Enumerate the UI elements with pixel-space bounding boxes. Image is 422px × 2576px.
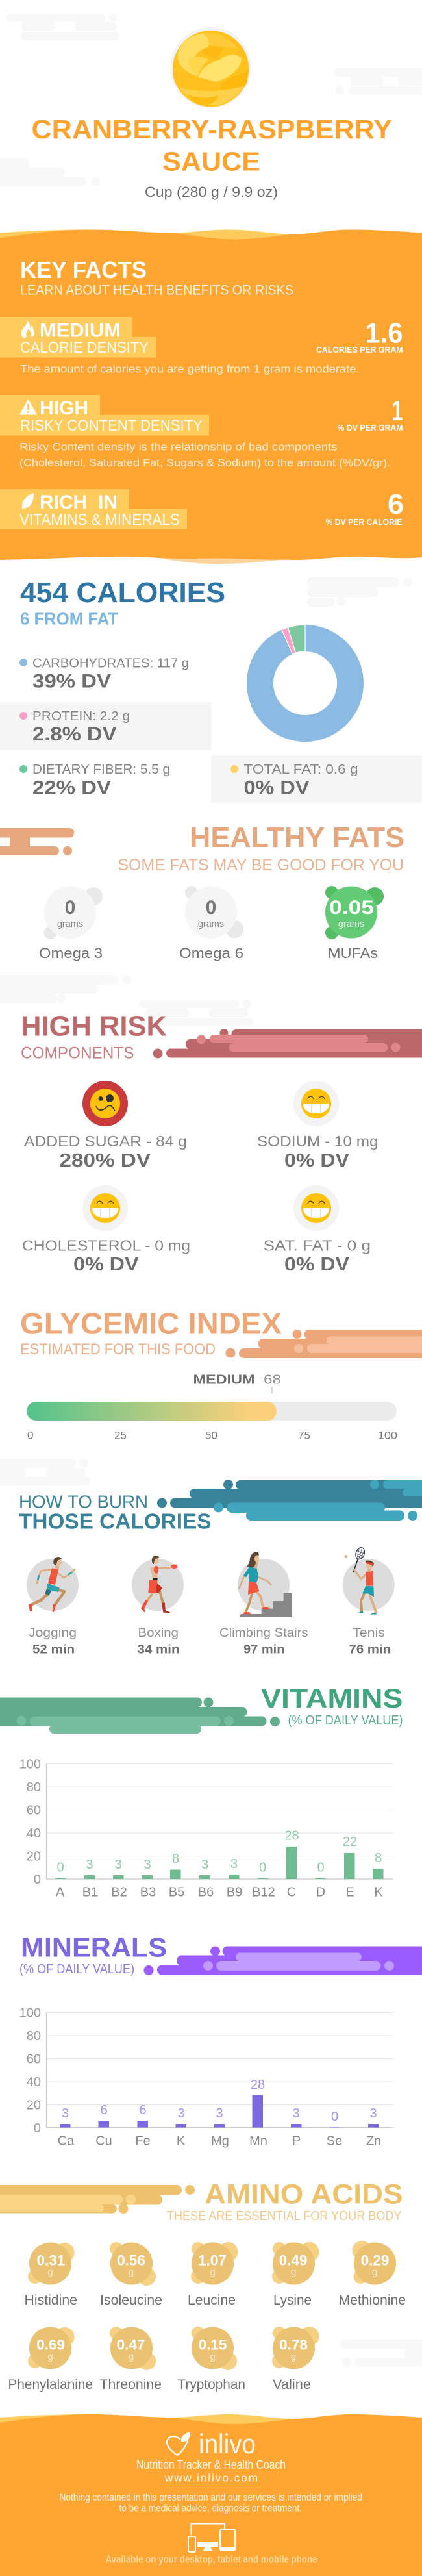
title: CRANBERRY-RASPBERRY (31, 114, 392, 144)
bar chart: vitamins: K (374, 1885, 383, 1899)
amino acid: tryptophan (178, 2327, 245, 2392)
gauge bar: MEDIUM (193, 1373, 254, 1387)
macro: carbohydrates: 39% DV (32, 670, 111, 692)
bar chart: vitamins: 0 (317, 1860, 325, 1875)
bar chart: minerals: Cu (95, 2134, 112, 2149)
bar chart: vitamins: 3 (86, 1858, 93, 1872)
risk: sodium (257, 1081, 378, 1171)
heading: calories: 454 CALORIES (20, 577, 225, 609)
icon: happy face (293, 1081, 339, 1126)
bar chart: vitamins: D (316, 1885, 325, 1899)
fact: calorie density: The amount of calories you are getting from 1 gram is moderate. (20, 362, 360, 375)
amino acid: threonine: 0.47 (117, 2337, 145, 2353)
amino acid: phenylalanine: g (47, 2351, 53, 2362)
bar chart: vitamins: B3 (140, 1885, 156, 1899)
fact: calorie density: 1.6 (365, 317, 403, 349)
banner (226, 1330, 422, 1358)
macro: protein (19, 709, 130, 745)
bar chart: minerals: 3 (62, 2106, 69, 2121)
fact: calorie density (0, 317, 403, 375)
bar chart: minerals: 80 (27, 2029, 41, 2043)
amino acid: valine (272, 2327, 319, 2392)
macro: protein: PROTEIN: 2.2 g (32, 709, 130, 724)
bar chart: minerals: 100 (19, 2006, 41, 2020)
panel: healthy fats (0, 822, 404, 961)
bar chart: minerals: 3 (369, 2106, 377, 2121)
fact: rich in vitamins and minerals: RICH IN (40, 492, 118, 513)
bar chart: minerals: 0 (331, 2110, 338, 2124)
food photo: peach slices in a glass bowl (170, 27, 251, 108)
bar chart: vitamins: B1 (82, 1885, 98, 1899)
subheading: THESE ARE ESSENTIAL FOR YOUR BODY (167, 2209, 401, 2223)
heading (19, 1491, 212, 1533)
bar chart: minerals: Fe (135, 2134, 151, 2149)
bar chart: minerals: K (177, 2134, 186, 2149)
bar chart: vitamins: 40 (27, 1826, 41, 1841)
activity: climbing stairs: 97 min (243, 1643, 284, 1656)
bar chart: vitamins: 80 (27, 1780, 41, 1795)
bar chart: vitamins: A (56, 1885, 65, 1899)
macro: dietary fiber: DIETARY FIBER: 5.5 g (32, 762, 170, 777)
macro: total fat: 0% DV (244, 777, 309, 799)
amino acid: valine: 0.78 (279, 2337, 308, 2353)
subheading: (% OF DAILY VALUE) (288, 1713, 403, 1728)
fact: risky content density: (Cholesterol, Saturated Fat, Sugars & Sodium) to the amount (%DV/gr). (19, 457, 390, 469)
bar chart: vitamins: B5 (169, 1885, 184, 1899)
subheading: calories from fat: 6 FROM FAT (20, 609, 118, 629)
activity: tennis (343, 1547, 395, 1656)
amino acid: threonine: g (129, 2351, 134, 2362)
fat: omega 3 (39, 886, 103, 961)
disclaimer: to be a medical advice, diagnosis or treatment. (119, 2503, 302, 2514)
bar chart: vitamins: 60 (27, 1803, 41, 1817)
banner (144, 1946, 422, 1975)
bar chart: vitamins: 3 (201, 1858, 208, 1872)
disclaimer (60, 2492, 362, 2514)
subheading: COMPONENTS (21, 1044, 134, 1063)
bar chart: minerals: 28 (251, 2078, 265, 2092)
panel: how to burn those calories (19, 1480, 422, 1656)
disclaimer: Nothing contained in this presentation and our services is intended or implied (60, 2492, 362, 2503)
bar chart: vitamins: 0 (34, 1873, 41, 1887)
logo: inlivo (199, 2429, 256, 2459)
gauge bar: 0 (27, 1429, 33, 1442)
amino acid: histidine: g (47, 2267, 53, 2278)
macro: dietary fiber (19, 762, 170, 799)
tagline: Nutrition Tracker & Health Coach (136, 2458, 286, 2472)
macro: protein: 2.8% DV (32, 724, 117, 745)
activity: climbing stairs: Climbing Stairs (219, 1626, 308, 1640)
bar chart: minerals: 3 (216, 2106, 223, 2121)
subheading: (% OF DAILY VALUE) (19, 1962, 134, 1976)
bar chart: minerals: Mg (211, 2134, 229, 2149)
logo (167, 2429, 256, 2459)
amino acid: phenylalanine (8, 2327, 93, 2392)
bar chart: vitamins: 100 (19, 1758, 41, 1772)
panel: footer (0, 2414, 422, 2576)
bar chart: vitamins: 8 (172, 1852, 179, 1866)
risk: added sugar: 280% DV (60, 1150, 151, 1171)
availability note: Available on your desktop, tablet and mobile phone (105, 2554, 317, 2566)
fact: risky content density (0, 395, 403, 469)
bar chart: vitamins: 3 (114, 1858, 122, 1872)
activity: tennis: Tenis (353, 1626, 385, 1640)
fact: calorie density: CALORIE DENSITY (20, 339, 149, 357)
heading: THOSE CALORIES (19, 1509, 212, 1533)
bar chart: minerals: 6 (100, 2103, 108, 2117)
amino acid: methionine: Methionine (339, 2293, 406, 2308)
bar chart: minerals: 40 (27, 2075, 41, 2090)
activity: boxing (132, 1556, 184, 1656)
heading: KEY FACTS (20, 257, 147, 283)
banner (0, 828, 74, 855)
heading: VITAMINS (261, 1683, 403, 1713)
bar chart: minerals: 0 (34, 2121, 41, 2136)
amino acid: tryptophan: Tryptophan (178, 2377, 245, 2392)
amino acid: threonine: Threonine (100, 2377, 162, 2392)
fat: MUFAs: grams (338, 919, 364, 929)
risk: sodium: SODIUM - 10 mg (257, 1133, 378, 1150)
fat: MUFAs: 0.05 (329, 897, 374, 918)
fact: rich in vitamins and minerals: VITAMINS & MINERALS (19, 511, 180, 529)
bar chart: vitamins: 0 (259, 1860, 266, 1875)
icon: boxer (132, 1556, 184, 1613)
panel: key facts (0, 230, 422, 564)
bar chart: vitamins: B12 (252, 1885, 275, 1899)
title (31, 114, 392, 177)
panel: vitamins (0, 1683, 403, 1899)
amino acid: leucine (188, 2242, 238, 2308)
heading: AMINO ACIDS (205, 2178, 403, 2210)
orange wave background (0, 2414, 422, 2576)
amino acid: phenylalanine: 0.69 (36, 2337, 65, 2353)
icon: devices (188, 2524, 235, 2552)
amino acid: lysine (272, 2242, 319, 2308)
macro: carbohydrates (19, 656, 189, 692)
bar chart: vitamins: B6 (198, 1885, 214, 1899)
amino acid: tryptophan: 0.15 (199, 2337, 227, 2353)
bar chart: minerals: Mn (249, 2134, 267, 2149)
icon: leaf (22, 493, 34, 509)
bar chart: minerals: 3 (177, 2106, 185, 2121)
activity: boxing: Boxing (138, 1626, 179, 1640)
amino acid: isoleucine: Isoleucine (100, 2293, 162, 2308)
amino acid: methionine: g (372, 2267, 377, 2278)
panel: amino acids (0, 2178, 406, 2392)
fact: risky content density: HIGH (40, 398, 88, 419)
icon: woman climbing stairs (238, 1552, 292, 1617)
fact: rich in vitamins and minerals (0, 488, 404, 529)
amino acid: isoleucine: g (129, 2267, 134, 2278)
activity: boxing: 34 min (138, 1643, 179, 1656)
panel: calories (0, 577, 422, 803)
panel: glycemic index (20, 1307, 422, 1442)
icon: flame (21, 320, 34, 338)
fat: omega 6 (179, 886, 243, 961)
gauge bar: 50 (205, 1429, 217, 1442)
risk: added sugar: ADDED SUGAR - 84 g (24, 1133, 187, 1150)
bar chart: minerals: Se (327, 2134, 342, 2149)
subheading: ESTIMATED FOR THIS FOOD (20, 1341, 216, 1358)
icon: runner (27, 1557, 79, 1612)
activity: jogging: Jogging (29, 1626, 77, 1640)
icon: warning triangle (19, 399, 37, 414)
fact: risky content density: % DV PER GRAM (338, 423, 403, 433)
bar chart: vitamins: 8 (375, 1851, 382, 1865)
fat: MUFAs (325, 886, 384, 961)
fact: rich in vitamins and minerals: 6 (388, 488, 404, 520)
icon: happy face (293, 1185, 339, 1231)
icon: heart with leaf (167, 2432, 190, 2455)
heading: MINERALS (21, 1932, 167, 1963)
macro: dietary fiber: 22% DV (32, 777, 111, 799)
fat: omega 3: grams (57, 919, 83, 929)
bar chart: vitamins: B2 (111, 1885, 127, 1899)
bar chart: vitamins (19, 1758, 393, 1899)
risk: cholesterol: CHOLESTEROL - 0 mg (22, 1237, 190, 1254)
bar chart: minerals (19, 2006, 393, 2149)
fat: MUFAs: MUFAs (328, 945, 378, 961)
bar chart: minerals: 60 (27, 2052, 41, 2067)
fat: omega 6: 0 (206, 897, 216, 918)
gauge bar (27, 1373, 397, 1442)
title: SAUCE (162, 147, 260, 177)
orange wave background (0, 230, 422, 564)
amino acid: leucine: Leucine (188, 2293, 236, 2308)
fact: rich in vitamins and minerals: % DV PER CALORIE (326, 518, 403, 527)
banner (0, 2185, 195, 2214)
risk: added sugar (24, 1081, 187, 1171)
amino acid: lysine: g (291, 2267, 296, 2278)
activity: climbing stairs (219, 1552, 308, 1656)
risk: sodium: 0% DV (284, 1150, 350, 1171)
banner (157, 1480, 422, 1521)
risk: cholesterol (22, 1185, 190, 1275)
bar chart: minerals: 6 (139, 2103, 147, 2117)
panel: high risk components (21, 1011, 422, 1275)
bar chart: vitamins: 0 (56, 1860, 64, 1875)
amino acid: leucine: g (210, 2267, 216, 2278)
amino acid: valine: g (291, 2351, 296, 2362)
bar chart: minerals: Ca (58, 2134, 75, 2149)
bar chart: minerals: P (292, 2134, 301, 2149)
macro: carbohydrates: CARBOHYDRATES: 117 g (32, 656, 189, 670)
heading: HOW TO BURN (19, 1491, 148, 1512)
panel: minerals (19, 1932, 422, 2149)
bar chart: vitamins: B9 (227, 1885, 242, 1899)
gauge bar: 25 (114, 1429, 127, 1442)
amino acid: histidine: 0.31 (37, 2253, 65, 2268)
icon: happy face (82, 1185, 128, 1231)
fact: risky content density: 1 (392, 395, 403, 427)
amino acid: methionine: 0.29 (361, 2253, 389, 2268)
amino acid: lysine: Lysine (273, 2293, 312, 2308)
bar chart: vitamins: 3 (230, 1857, 238, 1871)
banner (153, 1029, 422, 1059)
bar chart: vitamins: E (345, 1885, 354, 1899)
amino acid: isoleucine: 0.56 (117, 2253, 145, 2268)
fat: omega 3: 0 (65, 897, 75, 918)
bar chart: minerals: Zn (366, 2134, 381, 2149)
icon: unhappy face (82, 1081, 128, 1126)
fat: omega 6: Omega 6 (179, 945, 243, 961)
gauge bar: 68 (264, 1373, 281, 1387)
donut chart (247, 625, 364, 742)
activity: jogging (27, 1557, 79, 1656)
bar chart: vitamins: 22 (343, 1835, 357, 1849)
heading: GLYCEMIC INDEX (20, 1307, 282, 1341)
fact: risky content density: RISKY CONTENT DENSITY (20, 417, 203, 435)
amino acid: threonine (100, 2327, 162, 2392)
amino acid: lysine: 0.49 (279, 2253, 307, 2268)
bar chart: vitamins: 28 (284, 1829, 299, 1843)
amino acid: histidine: Histidine (25, 2293, 77, 2308)
amino acid: valine: Valine (273, 2377, 311, 2392)
gauge bar: 100 (378, 1429, 397, 1442)
amino acid: tryptophan: g (210, 2351, 216, 2362)
activity: tennis: 76 min (349, 1643, 391, 1656)
activity: jogging: 52 min (32, 1643, 75, 1656)
macro: total fat: TOTAL FAT: 0.6 g (244, 762, 358, 777)
risk: saturated fat (264, 1185, 371, 1275)
macro: total fat (230, 762, 358, 799)
fact: risky content density: Risky Content density is the relationship of bad components (19, 440, 338, 453)
website link: www.inlivo.com (164, 2472, 258, 2484)
fact: calorie density: MEDIUM (40, 320, 121, 342)
risk: saturated fat: 0% DV (284, 1254, 350, 1275)
icon: tennis player (343, 1547, 395, 1615)
subheading: LEARN ABOUT HEALTH BENEFITS OR RISKS (20, 283, 293, 297)
amino acid: methionine (339, 2241, 406, 2308)
amino acid: isoleucine (100, 2242, 162, 2308)
risk: saturated fat: SAT. FAT - 0 g (264, 1237, 371, 1254)
amino acid: histidine (25, 2242, 77, 2308)
subheading: SOME FATS MAY BE GOOD FOR YOU (118, 856, 404, 874)
bar chart: vitamins: C (287, 1885, 296, 1899)
heading: HIGH RISK (21, 1011, 167, 1042)
risk: cholesterol: 0% DV (73, 1254, 139, 1275)
serving size: Cup (280 g / 9.9 oz) (145, 184, 278, 200)
fat: omega 6: grams (198, 919, 224, 929)
fat: omega 3: Omega 3 (39, 945, 103, 961)
amino acid: phenylalanine: Phenylalanine (8, 2377, 93, 2392)
heading: HEALTHY FATS (190, 822, 404, 853)
fact: calorie density: CALORIES PER GRAM (316, 346, 403, 355)
gauge bar: 75 (298, 1429, 310, 1442)
bar chart: vitamins: 20 (27, 1850, 41, 1864)
amino acid: leucine: 1.07 (198, 2253, 227, 2268)
bar chart: minerals: 3 (292, 2106, 300, 2121)
banner (0, 1698, 280, 1734)
bar chart: vitamins: 3 (143, 1858, 151, 1872)
bar chart: minerals: 20 (27, 2098, 41, 2112)
